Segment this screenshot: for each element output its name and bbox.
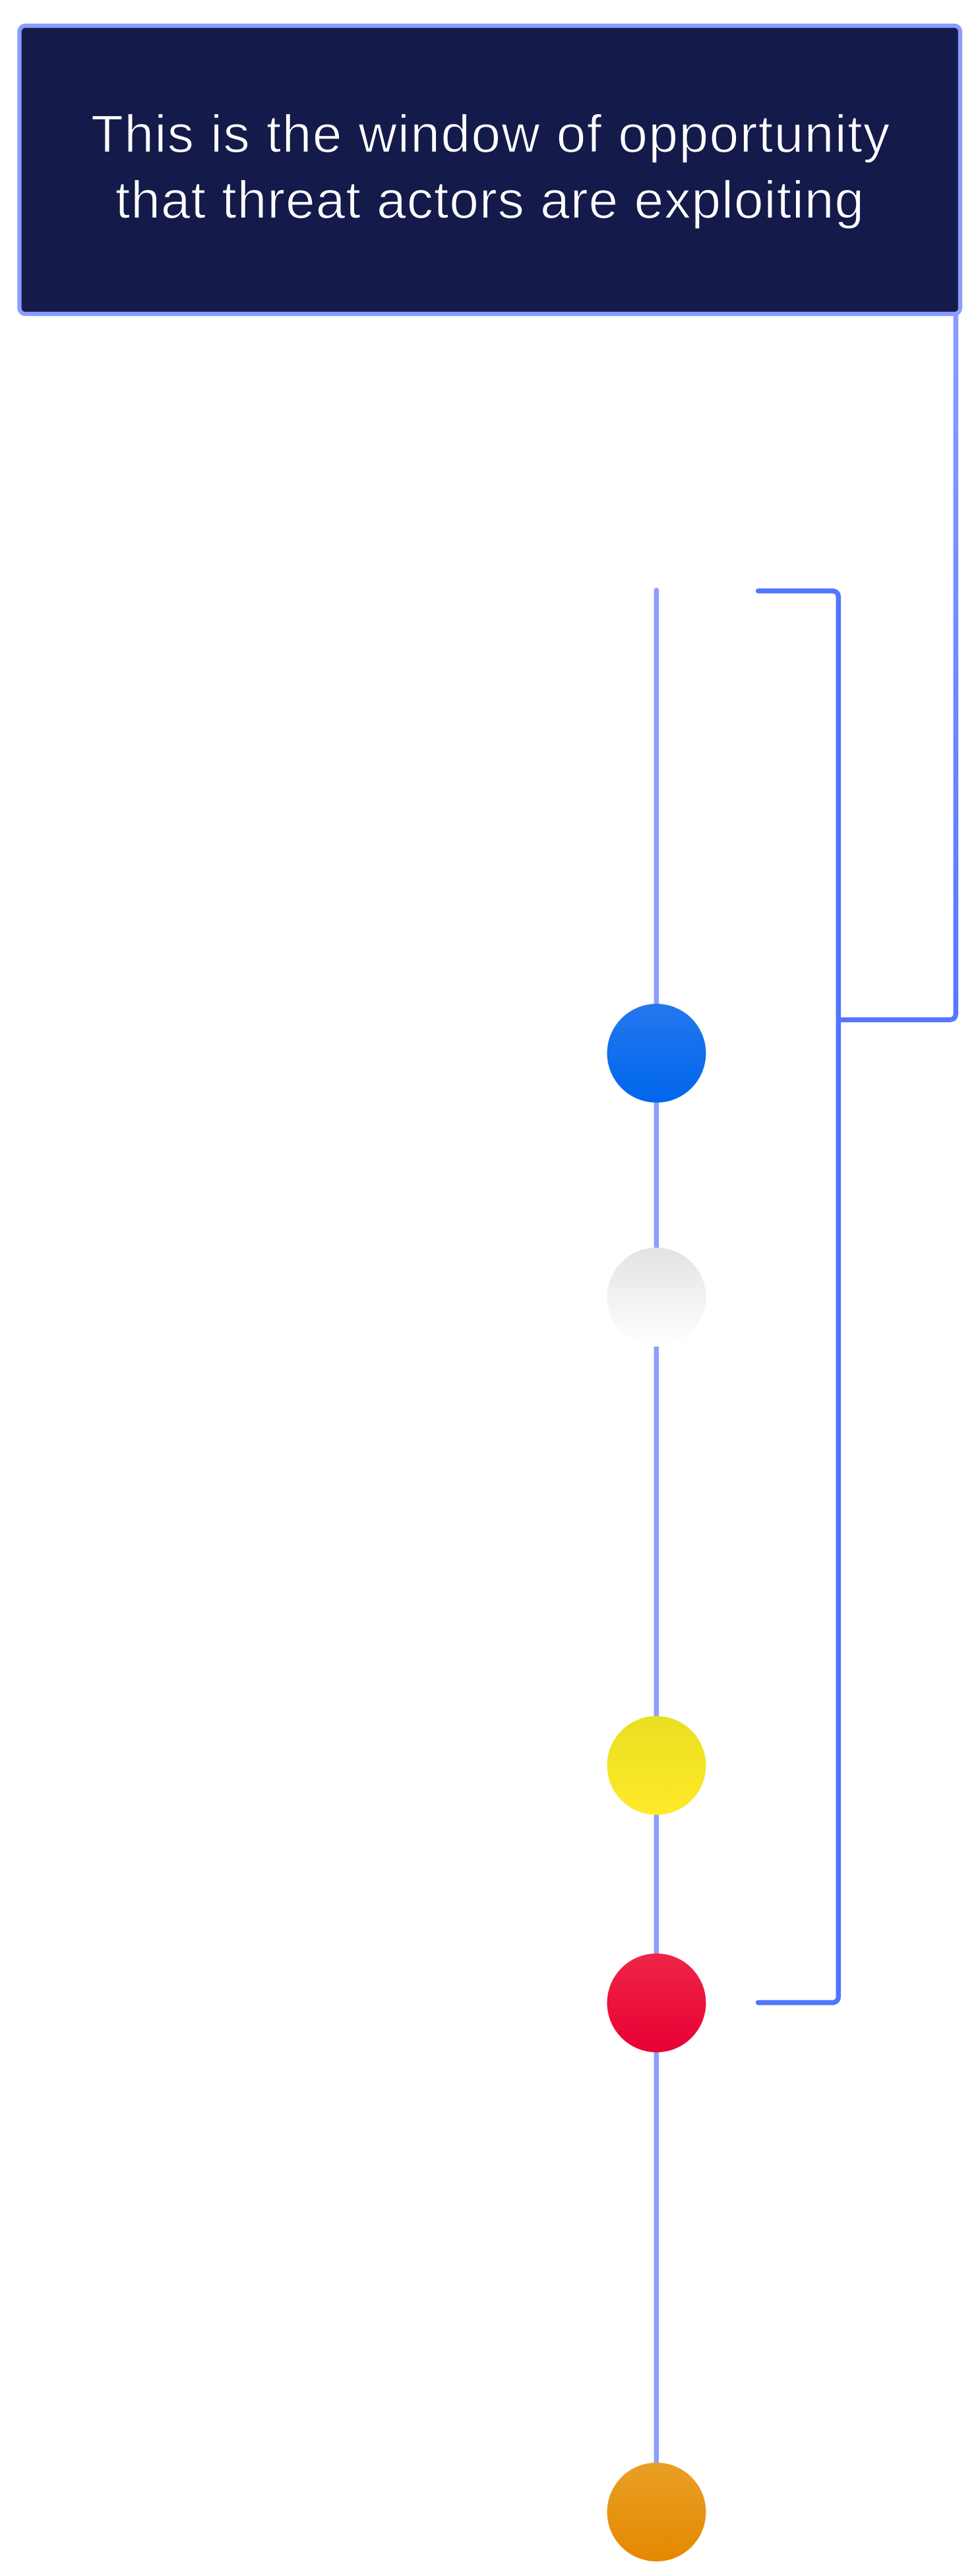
callout box	[20, 26, 960, 314]
timeline marker: blue	[607, 1004, 706, 1103]
connector from callout to bracket	[838, 314, 956, 1020]
timeline line	[654, 590, 659, 2463]
bracket	[758, 591, 838, 2003]
callout text: that threat actors are exploiting	[115, 170, 864, 230]
timeline marker: orange	[607, 2463, 706, 2561]
timeline marker: yellow	[607, 1716, 706, 1815]
callout text: This is the window of opportunity	[91, 104, 890, 164]
callout text	[91, 104, 890, 230]
timeline marker: grey	[607, 1248, 706, 1347]
timeline marker: red	[607, 1953, 706, 2052]
